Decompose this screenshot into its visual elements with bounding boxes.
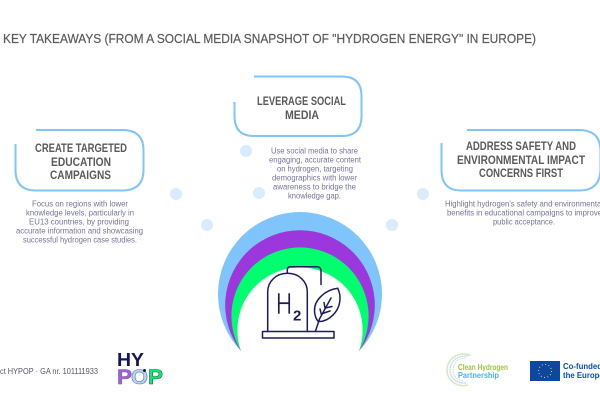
logo: HyPop: HY [117, 350, 144, 370]
center heading box [234, 76, 362, 136]
co-funded text [563, 362, 600, 380]
partnership name: Clean Hydrogen [458, 363, 508, 372]
icon: hydrogen tank with leaf [262, 267, 340, 338]
partnership name [458, 363, 508, 380]
right body text [445, 200, 600, 226]
center body text: knowledge gap. [288, 192, 341, 200]
left body text: knowledge levels, particularly in [26, 208, 134, 218]
partnership crescent [447, 354, 470, 386]
left heading: CREATE TARGETED [35, 141, 127, 155]
panel: address safety and environmental impact [442, 130, 600, 226]
footer project text: ct HYPOP · GA nr. 101111933 [0, 366, 98, 376]
center heading: MEDIA [285, 108, 319, 122]
connector dots [170, 145, 429, 231]
center body text [269, 146, 362, 200]
logo: HyPop: O [131, 366, 148, 389]
partnership name: Partnership [458, 371, 499, 380]
left heading [35, 141, 127, 182]
center body text: Use social media to share [271, 146, 359, 156]
left body text [16, 200, 143, 244]
right heading box [442, 130, 600, 190]
icon: hydrogen tank with leaf: 2 [293, 308, 301, 324]
logo: EU co-funded [530, 361, 600, 381]
center body text: on hydrogen, targeting [277, 164, 353, 174]
right heading: ADDRESS SAFETY AND [466, 139, 576, 153]
left heading: EDUCATION [51, 155, 111, 169]
left body text: Focus on regions with lower [32, 200, 128, 208]
right heading: CONCERNS FIRST [479, 166, 564, 180]
center heading [257, 94, 346, 122]
logo: Clean Hydrogen Partnership [447, 354, 508, 386]
center body text: engaging, accurate content [269, 156, 362, 164]
left body text: EU13 countries, by providing [29, 218, 129, 226]
title: KEY TAKEAWAYS (FROM A SOCIAL MEDIA SNAPSHOT OF "HYDROGEN ENERGY" IN EUROPE) [3, 31, 536, 46]
logo: HyPop: P [148, 366, 163, 389]
left heading: CAMPAIGNS [50, 168, 111, 182]
left body text: accurate information and showcasing [16, 226, 143, 236]
panel: leverage social media [234, 76, 362, 200]
logo: HyPop: P [117, 366, 132, 389]
right body text: public acceptance. [493, 218, 555, 226]
left heading box [16, 130, 144, 190]
right heading [457, 139, 586, 180]
EU flag [530, 361, 560, 381]
center body text: demographics with lower [272, 174, 357, 182]
concentric arcs [218, 212, 382, 351]
left body text: successful hydrogen case studies. [23, 236, 137, 244]
icon: hydrogen tank with leaf: H [276, 286, 292, 321]
center heading: LEVERAGE SOCIAL [257, 94, 346, 108]
center body text: awareness to bridge the [273, 182, 357, 192]
panel: create targeted education campaigns [16, 130, 144, 244]
logo: HyPop [117, 350, 163, 389]
